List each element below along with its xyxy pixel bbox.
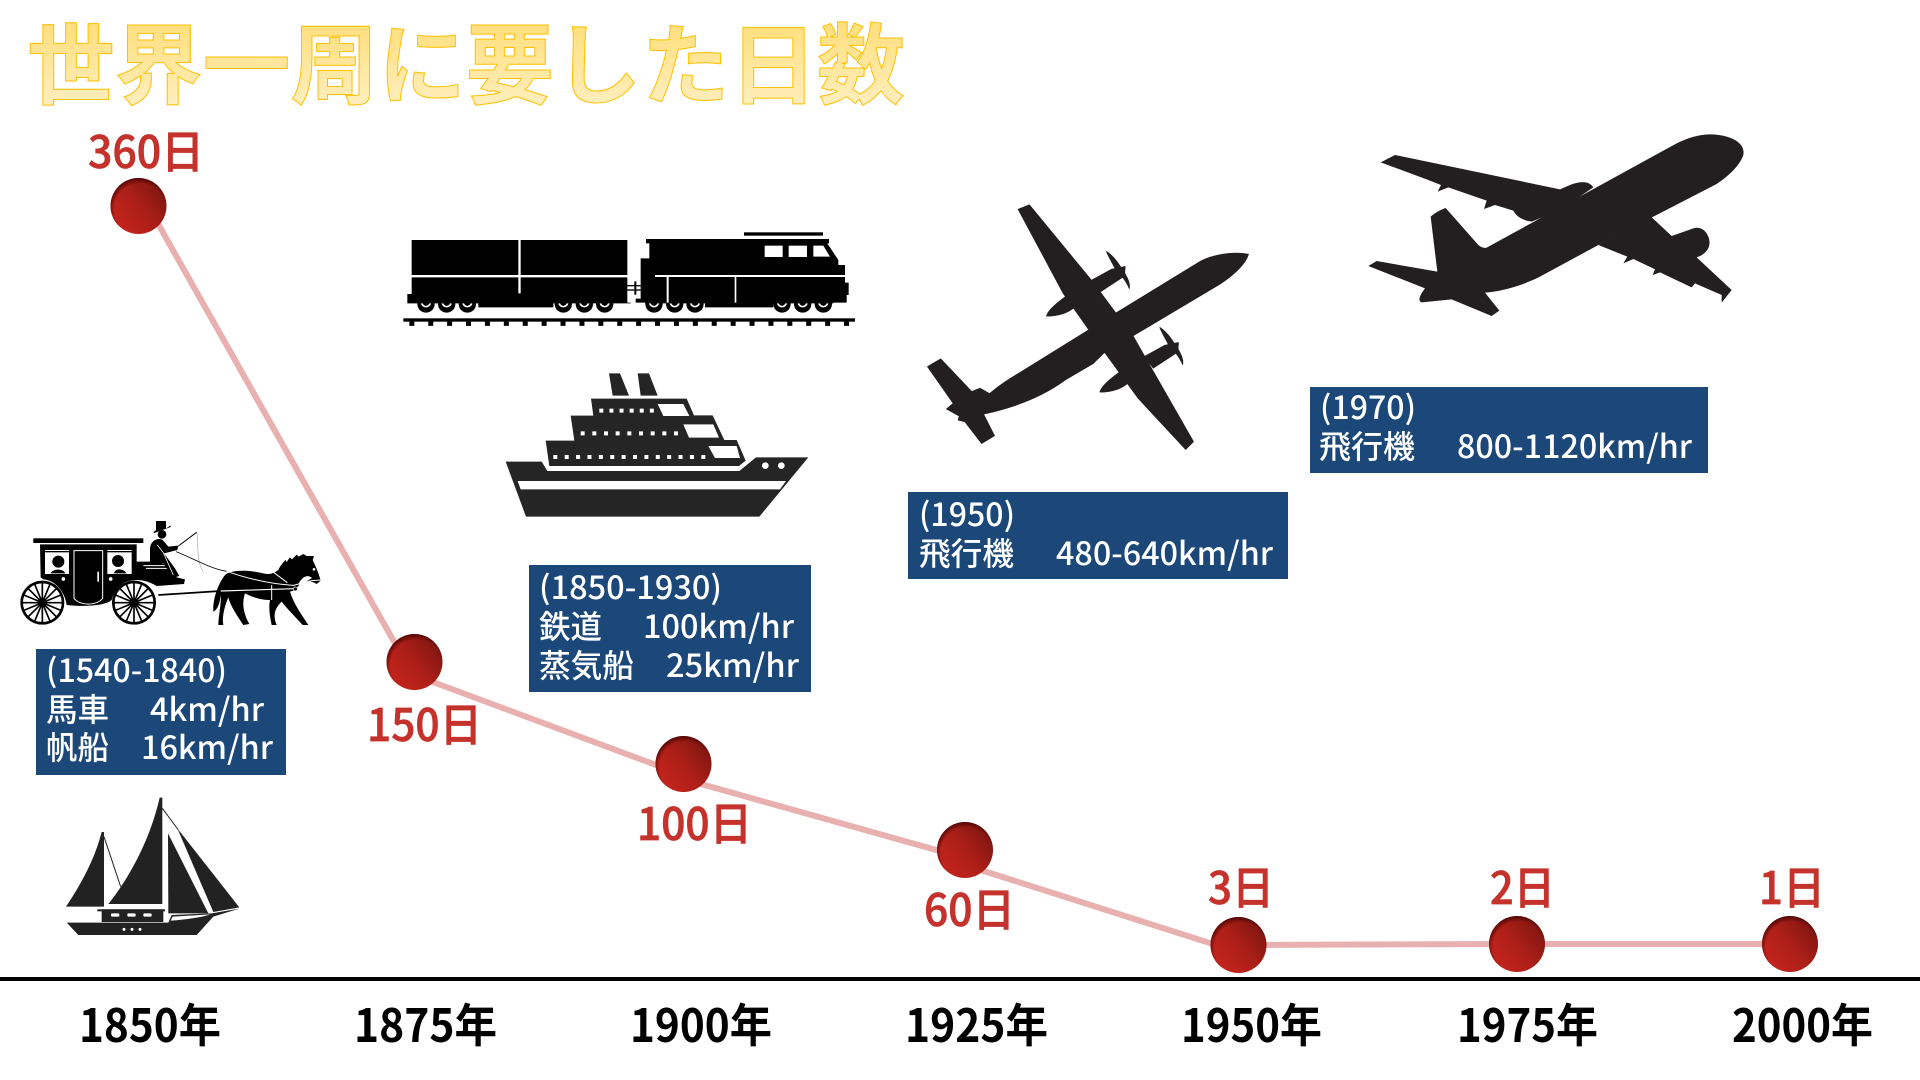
data labels: 2日: [1490, 852, 1555, 917]
year labels: 1875年: [354, 990, 497, 1056]
info box: 1950: [908, 490, 1288, 579]
info box: 1850-1930: 蒸気船: [539, 641, 634, 687]
year labels: [79, 990, 1873, 1056]
info box: 1850-1930: 100km/hr: [643, 602, 795, 648]
info box: 1950: 飛行機: [919, 529, 1014, 575]
data labels: [88, 116, 1825, 939]
year labels: 1975年: [1457, 990, 1598, 1056]
data labels: 1日: [1759, 852, 1825, 917]
info box: 1850-1930: 鉄道: [539, 602, 602, 648]
icon: turboprop airplane: [928, 205, 1248, 449]
info box: 1850-1930: 25km/hr: [666, 641, 800, 687]
info box: 1850-1930: [529, 563, 811, 692]
data labels: 360日: [88, 116, 204, 181]
info box: 1540-1840: 帆船: [46, 723, 109, 769]
year labels: 1850年: [79, 990, 221, 1056]
icon: cruise ship: [506, 373, 808, 517]
horse: [158, 552, 321, 625]
line chart: days per year: [88, 116, 1825, 973]
data labels: 3日: [1208, 852, 1274, 917]
icon: sailing ship: [66, 798, 239, 935]
info box: 1950: (1950): [919, 490, 1015, 536]
info box: 1540-1840: 16km/hr: [141, 723, 274, 769]
info box: 1540-1840: 馬車: [46, 685, 109, 731]
data labels: 150日: [367, 689, 482, 754]
info box: 1970: 飛行機: [1319, 422, 1415, 468]
icon: horse carriage: [22, 521, 321, 625]
icon: train: [403, 232, 855, 324]
info box: 1850-1930: (1850-1930): [539, 563, 722, 609]
info box: 1540-1840: [36, 646, 286, 775]
data labels: 60日: [924, 874, 1015, 939]
axis line: [0, 977, 1920, 981]
info box: 1970: 800-1120km/hr: [1457, 422, 1693, 468]
data labels: 100日: [637, 788, 752, 853]
x axis: [0, 977, 1920, 1056]
info box: 1540-1840: 4km/hr: [150, 685, 265, 731]
year labels: 1900年: [630, 990, 772, 1056]
year labels: 1950年: [1181, 990, 1322, 1056]
info box: 1950: 480-640km/hr: [1056, 529, 1274, 575]
info box: 1970: [1310, 383, 1708, 473]
info box: 1540-1840: (1540-1840): [46, 646, 227, 692]
year labels: 1925年: [905, 990, 1048, 1056]
data points: [110, 178, 1818, 973]
info box: 1970: (1970): [1320, 383, 1416, 429]
carriage and driver: [22, 521, 203, 623]
year labels: 2000年: [1732, 990, 1873, 1056]
trend line: [148, 206, 1790, 952]
icon: jet airliner: [1368, 134, 1744, 316]
